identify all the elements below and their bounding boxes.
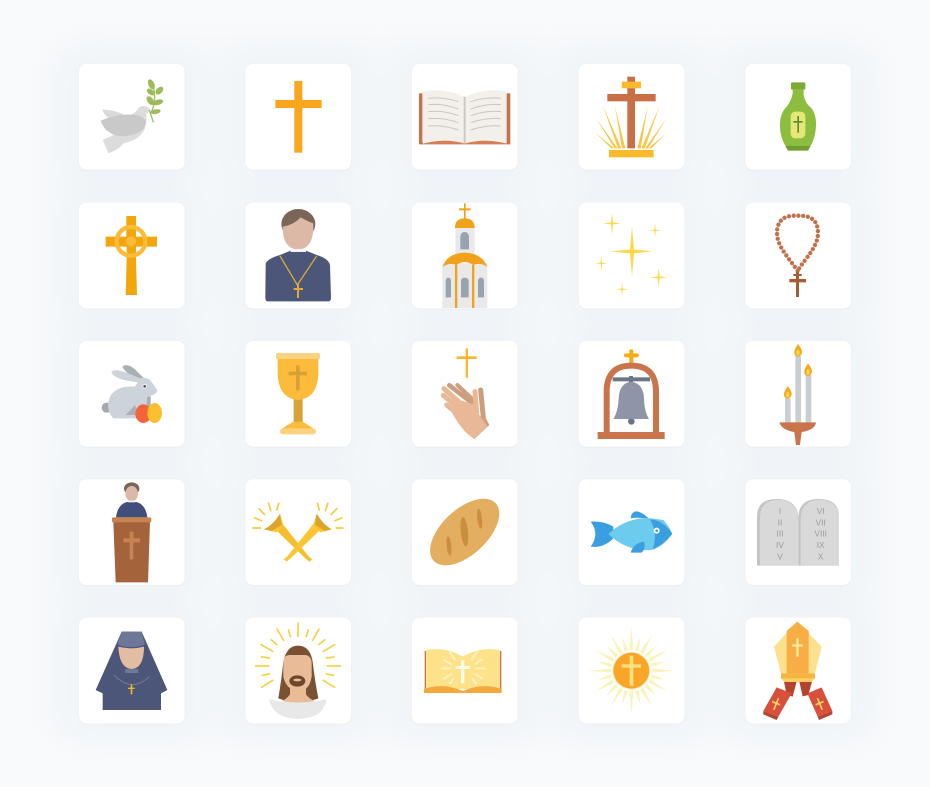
icon: stone tablets: II	[778, 517, 782, 527]
panel: easter rabbit card	[79, 341, 185, 447]
panel: rosary card	[745, 202, 851, 309]
icon: easter rabbit with eggs	[102, 365, 162, 423]
panel: cross card	[245, 64, 351, 170]
icon: fish	[591, 511, 672, 553]
icon: sparkling stars	[595, 213, 667, 296]
panel: chalice card	[245, 341, 351, 447]
panel: bread card	[412, 479, 518, 585]
panel: candles card	[745, 341, 851, 447]
panel: sparkling stars card	[578, 202, 685, 309]
icon: rosary	[777, 216, 818, 297]
panel: open book card	[412, 64, 518, 170]
panel: celtic cross card	[79, 202, 185, 309]
icon: wooden cross with rays	[595, 77, 667, 157]
icon: stone tablets: VIII	[814, 529, 827, 539]
panel: church card	[412, 202, 518, 309]
panel: glowing book card	[412, 617, 518, 724]
panel: trumpets card	[245, 479, 351, 585]
icon: crossed trumpets	[252, 503, 344, 562]
panel: ten commandments card	[745, 479, 851, 585]
panel: pulpit card	[79, 479, 185, 585]
icon: stone tablets: I	[779, 506, 781, 516]
icon: stone tablets	[757, 499, 839, 566]
icon: sun with cross	[588, 628, 675, 714]
panel: holy water bottle card	[745, 64, 851, 170]
icon: praying hands with cross	[443, 348, 489, 439]
panel: jesus card	[245, 617, 351, 724]
panel: nun card	[79, 617, 185, 724]
panel: radiant host card	[578, 617, 685, 724]
icon: stone tablets: VI	[817, 506, 825, 516]
icon: church	[442, 203, 487, 308]
icon: bread loaf	[418, 487, 511, 577]
icon: orange cross	[275, 81, 322, 153]
panel: bell card	[578, 341, 685, 447]
icon: nun	[96, 632, 167, 710]
panel: priest card	[245, 202, 351, 309]
panel: fish card	[578, 479, 685, 585]
icon: bishop mitre	[763, 622, 832, 720]
icon: stone tablets: IV	[776, 540, 784, 550]
icon: priest at pulpit	[112, 482, 151, 582]
icon: glowing bible	[424, 649, 502, 693]
icon: stone tablets: V	[777, 551, 783, 561]
icon: jesus with halo rays	[255, 622, 341, 719]
panel: dove card	[79, 64, 185, 170]
icon: stone tablets: IX	[817, 540, 825, 550]
icon: stone tablets: III	[777, 529, 783, 539]
icon: stone tablets: VII	[816, 517, 826, 527]
icon: dove with olive branch	[101, 78, 165, 153]
icon: chalice	[276, 353, 320, 434]
icon: church bell	[598, 349, 665, 439]
icon: celtic cross	[106, 216, 157, 295]
icon: priest	[265, 209, 331, 301]
icon: stone tablets: X	[818, 551, 824, 561]
icon: open bible	[419, 90, 510, 144]
panel: crucifix with rays card	[578, 64, 685, 170]
panel: praying hands card	[412, 341, 518, 447]
icon: green bottle	[780, 82, 816, 151]
icon: three candles	[779, 344, 816, 445]
panel: bishop mitre card	[745, 617, 851, 724]
